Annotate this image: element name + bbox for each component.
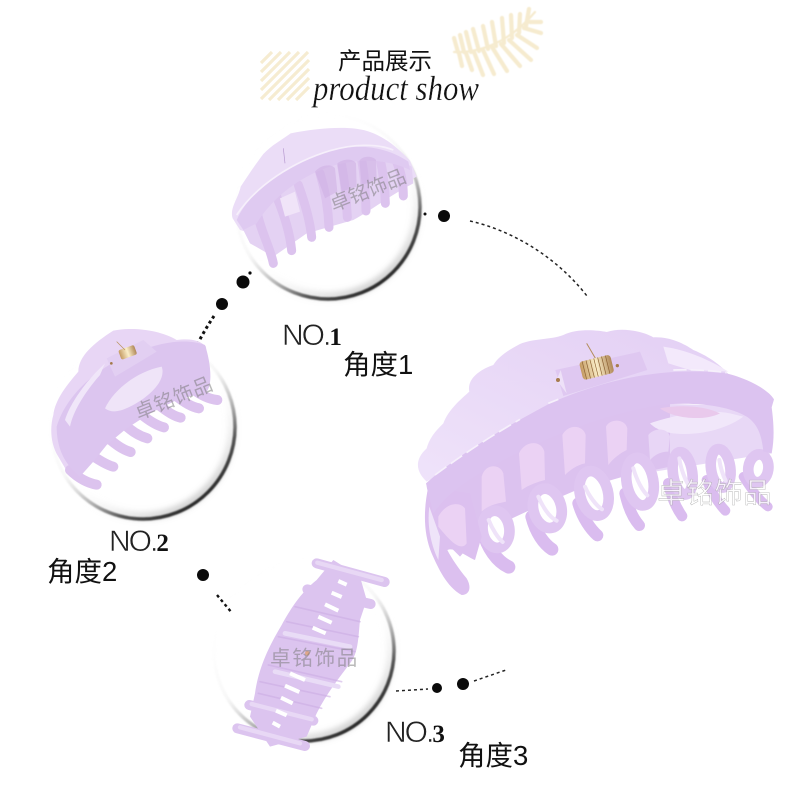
clip spring hinge [555, 343, 647, 396]
label: angle 3: 角度3 [458, 740, 528, 771]
clip windows [438, 421, 670, 546]
clip photo angle 1 [232, 128, 417, 263]
clip band highlights [435, 370, 727, 475]
title: English subtitle: product show [310, 69, 480, 108]
panel: circle 2 [51, 329, 235, 519]
panel: circle 1 [232, 115, 420, 299]
clip body behind teeth [427, 393, 670, 557]
title: Chinese heading: 产品展示 [338, 48, 432, 74]
label: NO.1: NO.1 [282, 319, 342, 352]
clip photo angle 3 [237, 560, 385, 747]
clip photo angle 2: 卓铭饰品 [132, 373, 216, 425]
clip photo angle 3: 卓铭饰品 [270, 647, 357, 670]
circle 2 rim [51, 335, 235, 519]
label: NO.3: NO.3 [385, 716, 445, 749]
label: NO.2: NO.2 [109, 525, 169, 558]
clip watermark: 卓铭饰品 [657, 478, 771, 509]
clip photo angle 2 [51, 329, 217, 485]
connector: circle 1 to large clip [424, 210, 587, 296]
panel: circle 3 [214, 560, 394, 747]
decorative palm leaf [454, 9, 541, 75]
circle 1 rim [236, 115, 420, 299]
clip upper shell [418, 330, 730, 482]
connector: circle 2 to circle 3 [197, 569, 232, 613]
connector: circle 3 to right [396, 670, 506, 693]
clip back teeth seen through rings [489, 458, 726, 542]
label: angle 2: 角度2 [47, 556, 117, 587]
circle 3 rim [214, 561, 394, 741]
clip teeth [483, 477, 768, 567]
clip left hook [425, 487, 482, 595]
clip pale underside at right [643, 403, 772, 473]
connector: circle 1 to circle 2 [197, 271, 252, 345]
clip photo angle 1: 卓铭饰品 [327, 165, 409, 216]
label: angle 1: 角度1 [343, 349, 413, 380]
decorative striped square [261, 52, 309, 100]
large clip photo [418, 330, 774, 595]
clip front band [426, 371, 774, 513]
clip tooth rings [480, 448, 770, 550]
